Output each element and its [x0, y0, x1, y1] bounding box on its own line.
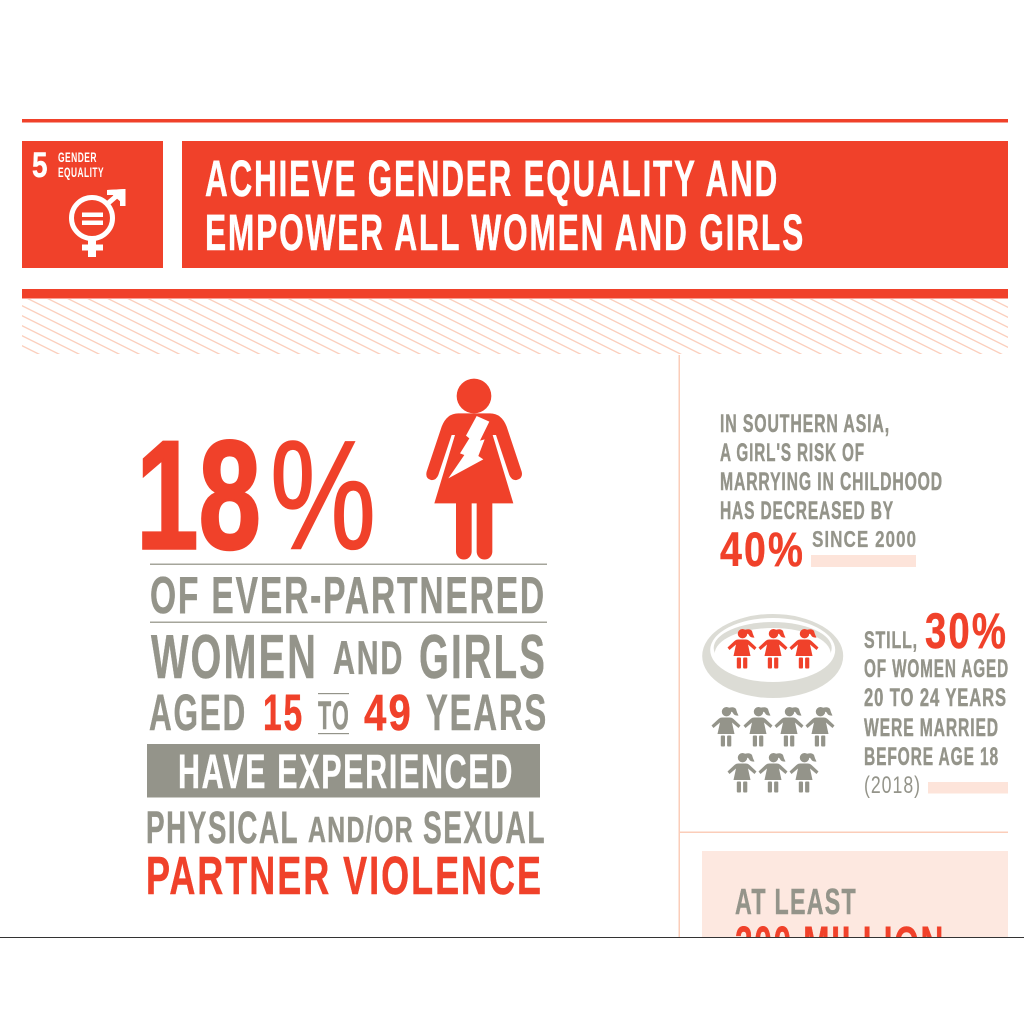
badge label: GENDER	[58, 150, 97, 165]
badge number: 5	[32, 146, 49, 185]
text block: STILL,	[864, 627, 918, 654]
panel: SDG 5 badge	[22, 141, 163, 268]
thick rule	[22, 289, 1008, 298]
line: women and girls: GIRLS	[419, 623, 547, 692]
icon: woman with lightning bolt	[426, 379, 522, 559]
line: aged 15 to 49 years: 15	[263, 684, 304, 741]
icon: wedding ring with girls	[702, 614, 843, 698]
line: aged 15 to 49 years: AGED	[149, 684, 247, 741]
text block: HAS DECREASED BY	[720, 497, 894, 525]
line: partner violence: PARTNER VIOLENCE	[146, 846, 543, 906]
text block: (2018)	[864, 772, 921, 799]
line: of ever-partnered: OF EVER-PARTNERED	[150, 567, 546, 625]
statistic 40%: 40%	[720, 524, 805, 577]
big number 18%: 18	[136, 408, 261, 582]
text block	[720, 410, 943, 525]
badge label	[58, 150, 104, 180]
top rule	[22, 119, 1008, 122]
big number 18%: %	[270, 408, 376, 582]
line: aged 15 to 49 years: 49	[364, 684, 413, 741]
line: women and girls: AND	[333, 631, 404, 684]
icon: gender equality symbol	[72, 189, 126, 257]
line: aged 15 to 49 years: TO	[318, 694, 350, 738]
line: women and girls	[151, 623, 547, 692]
panel: title banner	[182, 141, 1008, 268]
panel: child marriage in Southern Asia	[720, 410, 943, 577]
line: physical and/or sexual	[146, 802, 546, 853]
text block: A GIRL'S RISK OF	[720, 439, 865, 467]
panel: main statistic	[136, 379, 548, 906]
badge label: EQUALITY	[58, 165, 104, 180]
accent bar	[928, 782, 1008, 794]
since 2000	[811, 526, 917, 567]
panel: at least 200 million	[702, 851, 1008, 971]
line: physical and/or sexual: PHYSICAL	[146, 802, 299, 853]
line: aged 15 to 49 years: YEARS	[426, 684, 548, 741]
icon: grey girls	[712, 707, 834, 792]
text: AT LEAST	[735, 881, 857, 922]
since 2000: SINCE 2000	[812, 526, 917, 552]
line: physical and/or sexual: SEXUAL	[423, 802, 546, 853]
banner: have experienced: HAVE EXPERIENCED	[178, 746, 514, 799]
text	[735, 881, 945, 971]
title	[205, 150, 805, 261]
line: physical and/or sexual: AND/OR	[308, 809, 414, 850]
line: aged 15 to 49 years	[149, 684, 548, 741]
text block: IN SOUTHERN ASIA,	[720, 410, 890, 438]
banner: have experienced	[147, 744, 540, 799]
text block	[864, 603, 1009, 799]
panel: married before age 18	[702, 603, 1009, 799]
line: women and girls: WOMEN	[151, 623, 318, 692]
